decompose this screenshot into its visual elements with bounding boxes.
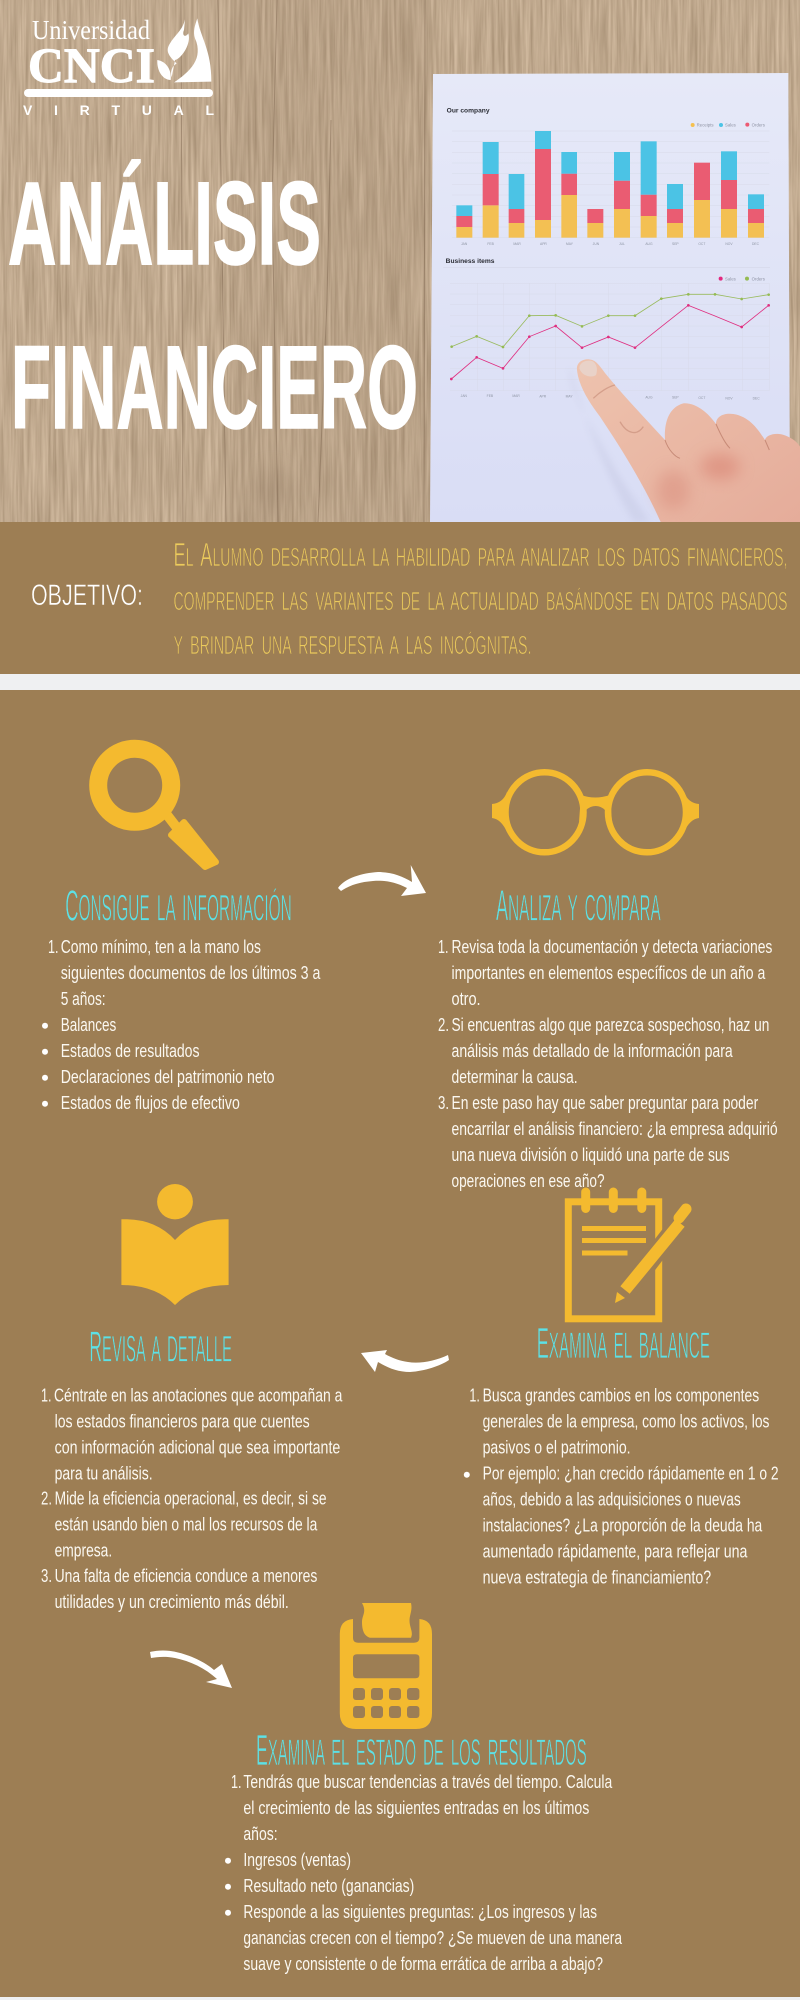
logo: Universidad CNCI Virtual: CNCI	[28, 37, 155, 93]
bar chart: Our company: JUL	[619, 242, 625, 246]
text block: analiza y compara: 1.	[438, 937, 448, 957]
bar chart: Our company: OCT	[698, 242, 705, 246]
text block: consigue la información	[42, 937, 321, 1113]
text block: examina el estado de los resultados: Responde a las siguientes preguntas: ¿Los ingresos y las	[243, 1902, 597, 1922]
text block: revisa a detalle: 3.	[41, 1566, 52, 1586]
text block: revisa a detalle: 1.	[41, 1386, 52, 1406]
text block: consigue la información: Estados de resultados	[61, 1041, 200, 1061]
text block: analiza y compara: 3.	[438, 1093, 449, 1113]
bar chart: Our company: Sales	[725, 123, 736, 128]
line chart: Business items: NOV	[725, 396, 733, 400]
text block: analiza y compara: 2.	[438, 1015, 449, 1035]
bar chart: Our company: MAR	[513, 242, 521, 246]
title: ANÁLISIS FINANCIERO: FINANCIERO	[11, 322, 418, 454]
text block: consigue la información: Como mínimo, ten a la mano los	[61, 937, 261, 957]
text block: examina el balance: nueva estrategia de financiamiento?	[483, 1568, 711, 1588]
hero photo: wood desk with paper	[0, 0, 800, 522]
line chart: Business items: SEP	[672, 396, 679, 400]
text block: examina el estado de los resultados: Tendrás que buscar tendencias a través del tiempo. Calcula	[243, 1772, 613, 1792]
text block: revisa a detalle: 2.	[41, 1488, 52, 1508]
icon: glasses	[492, 772, 699, 852]
bar chart: Our company	[447, 107, 769, 246]
bar chart: Our company: JAN	[461, 242, 468, 246]
title: ANÁLISIS FINANCIERO: ANÁLISIS	[8, 158, 321, 290]
objective text: Y BRINDAR UNA RESPUESTA A LAS INCÓGNITAS.	[174, 631, 532, 660]
text block: consigue la información: siguientes documentos de los últimos 3 a	[61, 963, 321, 983]
objective text	[174, 536, 788, 660]
text block: consigue la información: 5 años:	[61, 989, 106, 1009]
text block: revisa a detalle: Céntrate en las anotaciones que acompañan a	[54, 1386, 343, 1406]
bar chart: Our company: MAY	[566, 242, 574, 246]
paper with charts	[430, 73, 800, 522]
text block: revisa a detalle: utilidades y un crecimiento más débil.	[55, 1592, 289, 1612]
panel: objetivo band	[0, 522, 800, 674]
icon: notepad and pencil	[568, 1192, 686, 1319]
bar chart: Our company: Receipts	[697, 123, 714, 128]
logo: Universidad CNCI Virtual	[23, 15, 214, 118]
text block: revisa a detalle: empresa.	[55, 1540, 112, 1560]
arrow: step 1 to step 2	[338, 865, 426, 896]
text block: consigue la información: 1.	[48, 937, 58, 957]
bar chart: Our company: SEP	[672, 242, 679, 246]
text block: analiza y compara: operaciones en ese año?	[452, 1171, 605, 1191]
line chart: Business items: JAN	[461, 394, 468, 398]
hand pointing at chart	[570, 359, 800, 522]
text block: analiza y compara: determinar la causa.	[452, 1067, 578, 1087]
text block: examina el estado de los resultados	[225, 1772, 623, 1974]
icon: calculator with receipt	[340, 1603, 432, 1729]
text block: revisa a detalle: con información adicional que sea importante	[55, 1438, 340, 1458]
text block: revisa a detalle	[41, 1386, 343, 1612]
line chart: Business items	[443, 258, 770, 400]
arrow: step 3 to step 4	[361, 1350, 449, 1372]
arrow: step 4 to step 5	[150, 1650, 232, 1688]
line chart: Business items: MAR	[512, 394, 520, 398]
text block: revisa a detalle: los estados financieros para que cuentes	[55, 1412, 310, 1432]
text block: examina el estado de los resultados: el crecimiento de las siguientes entradas en los últimos	[243, 1798, 589, 1818]
text block: examina el estado de los resultados: suave y consistente o de forma errática de arriba a abajo?	[243, 1954, 603, 1974]
line chart: Business items: APR	[539, 394, 547, 398]
text block: analiza y compara: otro.	[452, 989, 481, 1009]
text block: revisa a detalle: están usando bien o mal los recursos de la	[55, 1514, 318, 1534]
text block: analiza y compara	[438, 937, 778, 1191]
line chart: Business items: Sales	[725, 276, 736, 281]
icon: open book reader	[121, 1184, 229, 1305]
line chart: Business items: Orders	[752, 276, 765, 281]
text block: examina el balance	[464, 1386, 779, 1588]
text block: examina el estado de los resultados: 1.	[231, 1772, 242, 1792]
text: REVISA A DETALLE	[89, 1323, 232, 1372]
text block: examina el balance: pasivos o el patrimonio.	[483, 1438, 631, 1458]
line chart: Business items: FEB	[487, 394, 494, 398]
bar chart: Our company: JUN	[593, 242, 600, 246]
bar chart: Our company: NOV	[725, 242, 733, 246]
title: ANÁLISIS FINANCIERO	[8, 158, 418, 454]
bar chart: Our company: APR	[540, 242, 547, 246]
line chart: Business items: OCT	[698, 396, 705, 400]
text block: examina el estado de los resultados: Ingresos (ventas)	[243, 1850, 351, 1870]
logo: Universidad CNCI Virtual: Universidad	[32, 15, 150, 45]
text block: examina el balance: 1.	[469, 1386, 480, 1406]
line chart: Business items: Business items	[446, 258, 495, 265]
line chart: Business items: DEC	[753, 396, 760, 400]
line chart: Business items: AUG	[645, 396, 653, 400]
text block: revisa a detalle: para tu análisis.	[55, 1464, 153, 1484]
text block: examina el estado de los resultados: años:	[243, 1824, 278, 1844]
text block: consigue la información: Declaraciones del patrimonio neto	[61, 1067, 275, 1087]
line chart: Business items: MAY	[566, 395, 573, 399]
bar chart: Our company: Orders	[752, 122, 765, 127]
bar chart: Our company: AUG	[645, 242, 653, 246]
label: objetivo: OBJETIVO:	[31, 579, 143, 612]
text block: revisa a detalle: Mide la eficiencia operacional, es decir, si se	[55, 1488, 326, 1508]
panel: main brown area	[0, 690, 800, 1997]
text block: revisa a detalle: Una falta de eficiencia conduce a menores	[55, 1566, 317, 1586]
bar chart: Our company: FEB	[487, 242, 495, 246]
bar chart: Our company: DEC	[752, 242, 760, 246]
text: CONSIGUE LA INFORMACIÓN	[65, 882, 292, 931]
text block: consigue la información: Balances	[61, 1015, 116, 1035]
text block: examina el estado de los resultados: ganancias crecen con el tiempo? ¿Se mueven de una manera	[243, 1928, 623, 1948]
icon: magnifying glass	[98, 749, 216, 867]
bar chart: Our company: Our company	[447, 107, 490, 114]
logo: Universidad CNCI Virtual: VIRTUAL	[23, 102, 214, 118]
text block: examina el estado de los resultados: Resultado neto (ganancias)	[243, 1876, 414, 1896]
text block: consigue la información: Estados de flujos de efectivo	[61, 1093, 240, 1113]
